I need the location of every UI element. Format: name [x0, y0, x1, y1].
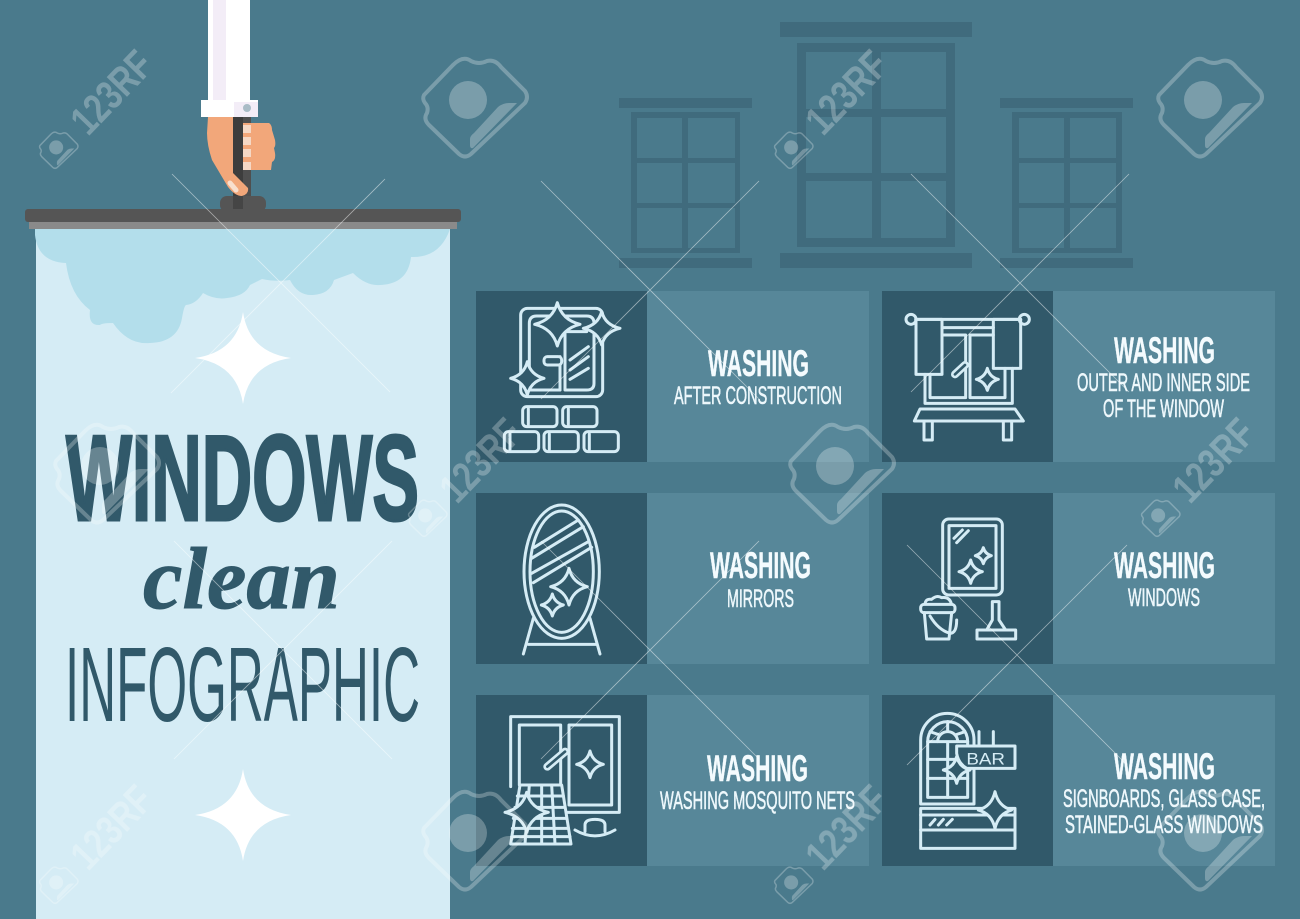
window: right: [1000, 98, 1133, 268]
panel: mirrors: [476, 493, 869, 664]
heading: WASHING: [1114, 330, 1215, 371]
watermark stamps: 123RF: [430, 410, 531, 511]
watermark stamps: 123RF: [796, 777, 897, 878]
card background: [476, 291, 869, 462]
heading: WASHING: [1114, 545, 1215, 586]
icon: window, bucket and squeegee: [921, 519, 1016, 639]
title: windows: WINDOWS: [66, 410, 419, 546]
arm with squeegee: [25, 0, 461, 229]
heading: WASHING: [1114, 746, 1215, 787]
watermark stamps: 123RF: [1163, 410, 1264, 511]
shirt sleeve: [208, 0, 250, 102]
window: left: [619, 98, 752, 268]
panel: clean glass: [36, 229, 450, 919]
squeegee handle: [220, 117, 266, 212]
panel: mosquito nets: [476, 695, 869, 866]
shirt cuff: [201, 100, 258, 117]
watermark stamps: 123RF: [796, 42, 897, 143]
card background: [476, 695, 869, 866]
watermark crosses: [171, 174, 1129, 765]
hand: [207, 117, 275, 196]
label: AFTER CONSTRUCTION: [674, 382, 842, 410]
icon: standing mirror: [523, 505, 600, 654]
title: [65, 410, 420, 744]
squeegee blade: [25, 209, 461, 229]
background windows: [619, 22, 1133, 268]
panel: signboards: [882, 695, 1275, 866]
text: INFOGRAPHIC: [65, 626, 420, 744]
heading: WASHING: [710, 545, 811, 586]
panel: after construction: [476, 291, 869, 462]
title: clean: clean: [143, 531, 340, 628]
panel: windows: [882, 493, 1275, 664]
watermark stamps: 123RF: [61, 42, 162, 143]
card background: [882, 695, 1275, 866]
sparkle: upper: [195, 312, 291, 404]
heading: WASHING: [707, 748, 808, 789]
icon: window with net and hat: [505, 717, 619, 844]
card background: [882, 291, 1275, 462]
icon: window and bricks: [504, 303, 620, 452]
card background: [882, 493, 1275, 664]
icon: window with curtains: [906, 314, 1029, 440]
watermark stamps: 123RF: [61, 777, 162, 878]
sign text: BAR: [966, 750, 1005, 769]
label: WASHING MOSQUITO NETS: [660, 787, 855, 815]
panel: outer and inner side: [882, 291, 1275, 462]
label: WINDOWS: [1128, 584, 1200, 612]
heading: WASHING: [708, 343, 809, 384]
icon: arched window, bar sign and shop case: [921, 713, 1015, 848]
foam cloud: [35, 229, 450, 343]
card background: [476, 493, 869, 664]
window: centre: [780, 22, 972, 268]
label: MIRRORS: [727, 585, 794, 613]
sparkle: lower: [195, 769, 291, 861]
